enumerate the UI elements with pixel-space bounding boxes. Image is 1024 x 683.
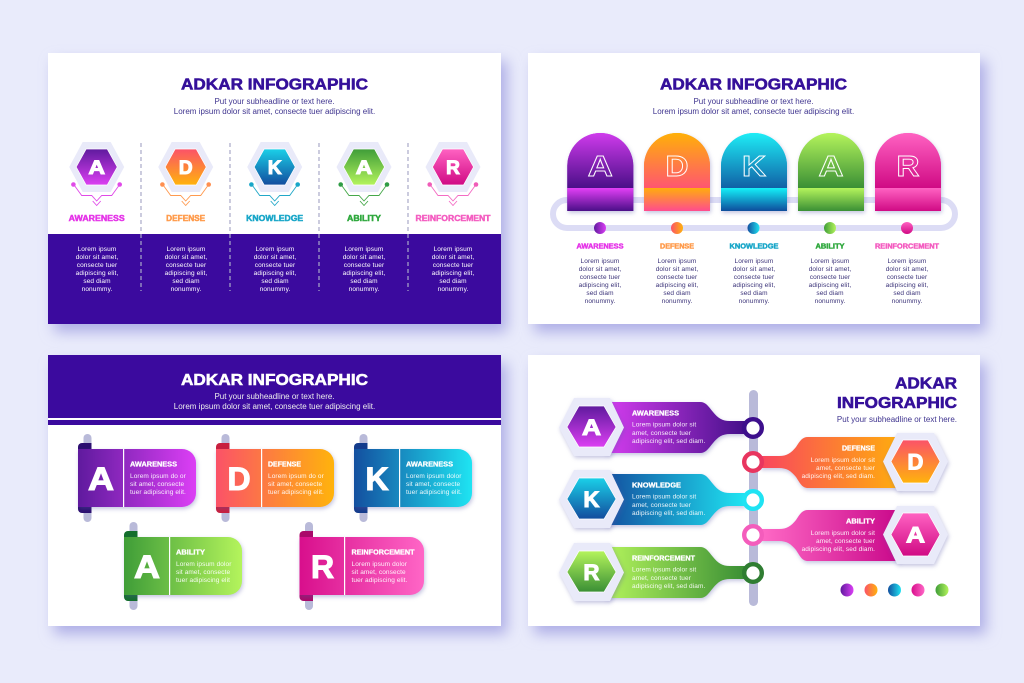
tag: A awareness: adipiscing elit, sed diam. bbox=[632, 438, 706, 445]
title: INFOGRAPHIC bbox=[837, 395, 957, 412]
card: D defense: Lorem ipsum do or bbox=[268, 473, 325, 480]
card: A awareness: AWARENESS bbox=[130, 462, 177, 468]
subtitle: Put your subheadline or text here. bbox=[214, 97, 335, 106]
text block: defense: consecte tuer bbox=[166, 262, 207, 269]
tag: D defense: DEFENSE bbox=[842, 446, 875, 452]
text block: knowledge: dolor sit amet, bbox=[254, 254, 296, 261]
labels row bbox=[576, 244, 940, 250]
tag: R reinforcement: amet, consecte tuer bbox=[632, 575, 692, 582]
text block: awareness: nonummy. bbox=[585, 298, 615, 305]
text block: reinforcement: dolor sit amet, bbox=[886, 266, 928, 273]
text block: reinforcement bbox=[432, 246, 474, 293]
text block: knowledge: nonummy. bbox=[260, 286, 290, 293]
labels row: REINFORCEMENT bbox=[875, 244, 940, 250]
text block: reinforcement: consecte tuer bbox=[887, 274, 928, 281]
icon: D hexagon defense: D bbox=[179, 158, 193, 179]
label: reinforcement: REINFORCEMENT bbox=[416, 214, 491, 223]
icon: A hexagon awareness: A bbox=[88, 158, 105, 179]
card: A ability: sit amet, consecte bbox=[176, 569, 230, 576]
text block: ability: nonummy. bbox=[815, 298, 845, 305]
tag: K knowledge bbox=[559, 470, 762, 528]
tag: D defense: adipiscing elit, sed diam. bbox=[802, 473, 875, 480]
tag: K knowledge: KNOWLEDGE bbox=[632, 482, 681, 490]
card: R reinforcement: R bbox=[311, 549, 334, 585]
arch: R bbox=[875, 133, 941, 211]
text block: awareness: dolor sit amet, bbox=[579, 266, 621, 273]
icon: K hexagon knowledge bbox=[247, 142, 302, 206]
text block: defense bbox=[656, 258, 698, 305]
text block: knowledge: Lorem ipsum bbox=[256, 246, 294, 253]
text block: knowledge: sed diam bbox=[740, 290, 768, 297]
text block: ability: sed diam bbox=[816, 290, 844, 297]
vertical line bbox=[749, 390, 758, 606]
subtitle: Lorem ipsum dolor sit amet, consecte tuer adipiscing elit. bbox=[653, 107, 854, 116]
text block: reinforcement: Lorem ipsum bbox=[434, 246, 472, 253]
label: defense: DEFENSE bbox=[166, 214, 206, 223]
card: A ability: Lorem ipsum dolor bbox=[176, 561, 232, 568]
arch: A bbox=[567, 133, 633, 211]
header band bbox=[48, 355, 501, 418]
subtitle: Lorem ipsum dolor sit amet, consecte tuer adipiscing elit. bbox=[174, 107, 375, 116]
text block: awareness bbox=[76, 246, 118, 293]
label: ability: ABILITY bbox=[347, 214, 382, 223]
card: A awareness: A bbox=[88, 461, 114, 497]
text block: ability: consecte tuer bbox=[344, 262, 385, 269]
text block: defense: Lorem ipsum bbox=[167, 246, 205, 253]
title bbox=[837, 376, 957, 412]
card: R reinforcement: Lorem ipsum dolor bbox=[352, 561, 408, 568]
text block: ability: sed diam bbox=[350, 278, 378, 285]
text block: ability bbox=[343, 246, 385, 293]
icon: A hexagon ability: A bbox=[356, 158, 373, 179]
subtitle bbox=[174, 392, 375, 411]
text block: reinforcement: nonummy. bbox=[892, 298, 922, 305]
text block: knowledge: consecte tuer bbox=[255, 262, 296, 269]
text block: ability bbox=[809, 258, 851, 305]
text block: knowledge: nonummy. bbox=[739, 298, 769, 305]
panel: ribbon cards bbox=[48, 355, 501, 626]
tag: A ability: adipiscing elit, sed diam. bbox=[802, 546, 875, 553]
card: K awareness: K bbox=[365, 461, 389, 497]
text block: reinforcement bbox=[886, 258, 928, 305]
text block: awareness: consecte tuer bbox=[77, 262, 118, 269]
subtitle: Lorem ipsum dolor sit amet, consecte tuer adipiscing elit. bbox=[174, 402, 375, 411]
text block: defense: nonummy. bbox=[171, 286, 201, 293]
tag: R reinforcement bbox=[559, 543, 762, 601]
text block: reinforcement: nonummy. bbox=[438, 286, 468, 293]
text block: awareness: Lorem ipsum bbox=[78, 246, 116, 253]
text block: ability: adipiscing elit, bbox=[809, 282, 851, 289]
panel: hexagon tags on vertical line bbox=[528, 355, 980, 626]
text block: reinforcement: Lorem ipsum bbox=[888, 258, 926, 265]
text block: knowledge bbox=[254, 246, 296, 293]
title: ADKAR INFOGRAPHIC bbox=[660, 76, 847, 94]
text block: reinforcement: sed diam bbox=[439, 278, 467, 285]
text block: knowledge: consecte tuer bbox=[734, 274, 775, 281]
tag: R reinforcement: REINFORCEMENT bbox=[632, 556, 696, 562]
labels row: KNOWLEDGE bbox=[730, 244, 779, 250]
arch: A green: A bbox=[818, 151, 844, 183]
text block: defense: dolor sit amet, bbox=[165, 254, 207, 261]
card: R reinforcement: tuer adipiscing elit. bbox=[352, 577, 408, 584]
text block: awareness: sed diam bbox=[586, 290, 614, 297]
text block: defense: Lorem ipsum bbox=[658, 258, 696, 265]
text block: reinforcement: adipiscing elit, bbox=[432, 270, 474, 277]
icon: R hexagon reinforcement: R bbox=[446, 158, 460, 179]
text block: knowledge: sed diam bbox=[261, 278, 289, 285]
tag: D defense bbox=[744, 433, 948, 491]
arch: K bbox=[721, 133, 787, 211]
tag: K knowledge: adipiscing elit, sed diam. bbox=[632, 510, 706, 517]
card: K awareness bbox=[354, 434, 472, 522]
icon: K hexagon knowledge: K bbox=[268, 158, 282, 179]
card: A ability: ABILITY bbox=[176, 550, 205, 556]
card: R reinforcement bbox=[300, 522, 424, 610]
subtitle bbox=[653, 97, 854, 116]
card: A awareness bbox=[78, 434, 196, 522]
tag: A ability: amet, consecte tuer bbox=[816, 538, 876, 545]
card: R reinforcement: sit amet, consecte bbox=[352, 569, 406, 576]
text block: ability: dolor sit amet, bbox=[809, 266, 851, 273]
tag: R reinforcement: adipiscing elit, sed diam. bbox=[632, 583, 706, 590]
panel: arch timeline bbox=[528, 53, 980, 324]
text block: ability: nonummy. bbox=[349, 286, 379, 293]
card: K awareness: Lorem ipsum dolor bbox=[406, 473, 462, 480]
text block: awareness bbox=[579, 258, 621, 305]
tag: A ability bbox=[744, 506, 948, 564]
text block: awareness: adipiscing elit, bbox=[579, 282, 621, 289]
text block: knowledge: adipiscing elit, bbox=[254, 270, 296, 277]
text block: awareness: adipiscing elit, bbox=[76, 270, 118, 277]
text block: awareness: nonummy. bbox=[82, 286, 112, 293]
icon: A hexagon ability bbox=[336, 142, 392, 206]
tag: A awareness: Lorem ipsum dolor sit bbox=[632, 422, 696, 428]
tag: K knowledge: amet, consecte tuer bbox=[632, 502, 692, 509]
text block: knowledge: Lorem ipsum bbox=[735, 258, 773, 265]
text block: awareness: Lorem ipsum bbox=[581, 258, 619, 265]
tag: A awareness: AWARENESS bbox=[632, 410, 679, 418]
title: ADKAR INFOGRAPHIC bbox=[181, 76, 368, 94]
text block: ability: dolor sit amet, bbox=[343, 254, 385, 261]
text block: reinforcement: consecte tuer bbox=[433, 262, 474, 269]
subtitle: Put your subheadline or text here. bbox=[837, 415, 957, 424]
text block: ability: Lorem ipsum bbox=[345, 246, 383, 253]
card: D defense: sit amet, consecte bbox=[268, 481, 322, 488]
card: A awareness: sit amet, consecte bbox=[130, 481, 184, 488]
card: D defense bbox=[216, 434, 334, 522]
label: awareness: AWARENESS bbox=[69, 214, 125, 223]
tag: K knowledge: Lorem ipsum dolor sit bbox=[632, 494, 696, 500]
tag: D defense: Lorem ipsum dolor sit bbox=[811, 457, 875, 464]
subtitle: Put your subheadline or text here. bbox=[693, 97, 814, 106]
text block: ability: Lorem ipsum bbox=[811, 258, 849, 265]
card: A ability bbox=[124, 522, 242, 610]
labels row: DEFENSE bbox=[660, 244, 694, 250]
card: K awareness: AWARENESS bbox=[406, 462, 453, 468]
timeline track bbox=[553, 200, 955, 228]
subtitle: Put your subheadline or text here. bbox=[214, 392, 335, 401]
timeline dots bbox=[594, 222, 913, 234]
label: knowledge: KNOWLEDGE bbox=[246, 214, 304, 223]
icon: A hexagon awareness bbox=[69, 142, 124, 206]
text block: knowledge: dolor sit amet, bbox=[733, 266, 775, 273]
card: D defense: D bbox=[227, 461, 251, 497]
text block: defense: sed diam bbox=[172, 278, 200, 285]
arch: D: D bbox=[666, 151, 688, 183]
text block: awareness: sed diam bbox=[83, 278, 111, 285]
text block: defense: dolor sit amet, bbox=[656, 266, 698, 273]
text block: reinforcement: adipiscing elit, bbox=[886, 282, 928, 289]
labels row: ABILITY bbox=[816, 244, 845, 250]
text block: knowledge bbox=[733, 258, 775, 305]
arch: R: R bbox=[896, 151, 920, 183]
legend dots bbox=[840, 584, 948, 596]
tag: A ability: A bbox=[906, 522, 925, 548]
tag: R reinforcement: R bbox=[584, 560, 600, 585]
card: A ability: A bbox=[134, 549, 160, 585]
arch: A green bbox=[798, 133, 864, 211]
text block: knowledge: adipiscing elit, bbox=[733, 282, 775, 289]
text block: defense: nonummy. bbox=[662, 298, 692, 305]
subtitle bbox=[174, 97, 375, 116]
card: K awareness: sit amet, consecte bbox=[406, 481, 460, 488]
tag: A awareness: A bbox=[582, 415, 601, 440]
text block: reinforcement: dolor sit amet, bbox=[432, 254, 474, 261]
tag: A ability: ABILITY bbox=[846, 518, 875, 526]
card: A ability: tuer adipiscing elit bbox=[176, 577, 230, 584]
card: D defense: DEFENSE bbox=[268, 462, 301, 468]
text block: defense: adipiscing elit, bbox=[165, 270, 207, 277]
text block: ability: adipiscing elit, bbox=[343, 270, 385, 277]
arch: D bbox=[644, 133, 710, 211]
text block: defense: consecte tuer bbox=[657, 274, 698, 281]
icon: D hexagon defense bbox=[158, 142, 213, 206]
tag: A awareness bbox=[559, 398, 762, 456]
title: ADKAR bbox=[895, 376, 957, 392]
text block: defense bbox=[165, 246, 207, 293]
tag: K knowledge: K bbox=[584, 487, 600, 512]
icon: R hexagon reinforcement bbox=[426, 142, 480, 206]
labels row: AWARENESS bbox=[576, 244, 624, 250]
card: A awareness: Lorem ipsum do or bbox=[130, 473, 187, 480]
text block: defense: sed diam bbox=[663, 290, 691, 297]
text block: awareness: consecte tuer bbox=[580, 274, 621, 281]
tag: D defense: D bbox=[908, 450, 923, 474]
tag: A awareness: amet, consecte tuer bbox=[632, 430, 692, 437]
title: ADKAR INFOGRAPHIC bbox=[181, 372, 368, 389]
card: D defense: tuer adipiscing elit. bbox=[268, 489, 324, 496]
card: K awareness: tuer adipiscing elit. bbox=[406, 489, 462, 496]
arch: A: A bbox=[588, 151, 613, 183]
card: R reinforcement: REINFORCEMENT bbox=[352, 550, 415, 556]
text block: defense: adipiscing elit, bbox=[656, 282, 698, 289]
card: A awareness: tuer adipiscing elit. bbox=[130, 489, 186, 496]
text block: awareness: dolor sit amet, bbox=[76, 254, 118, 261]
arch: K: K bbox=[742, 151, 766, 183]
panel: hexagon columns bbox=[48, 53, 501, 324]
panel band bbox=[48, 234, 501, 324]
text block: reinforcement: sed diam bbox=[893, 290, 921, 297]
text block: ability: consecte tuer bbox=[810, 274, 851, 281]
tag: R reinforcement: Lorem ipsum dolor sit bbox=[632, 566, 696, 574]
tag: D defense: amet, consecte tuer bbox=[816, 465, 876, 472]
tag: A ability: Lorem ipsum dolor sit bbox=[811, 530, 875, 537]
